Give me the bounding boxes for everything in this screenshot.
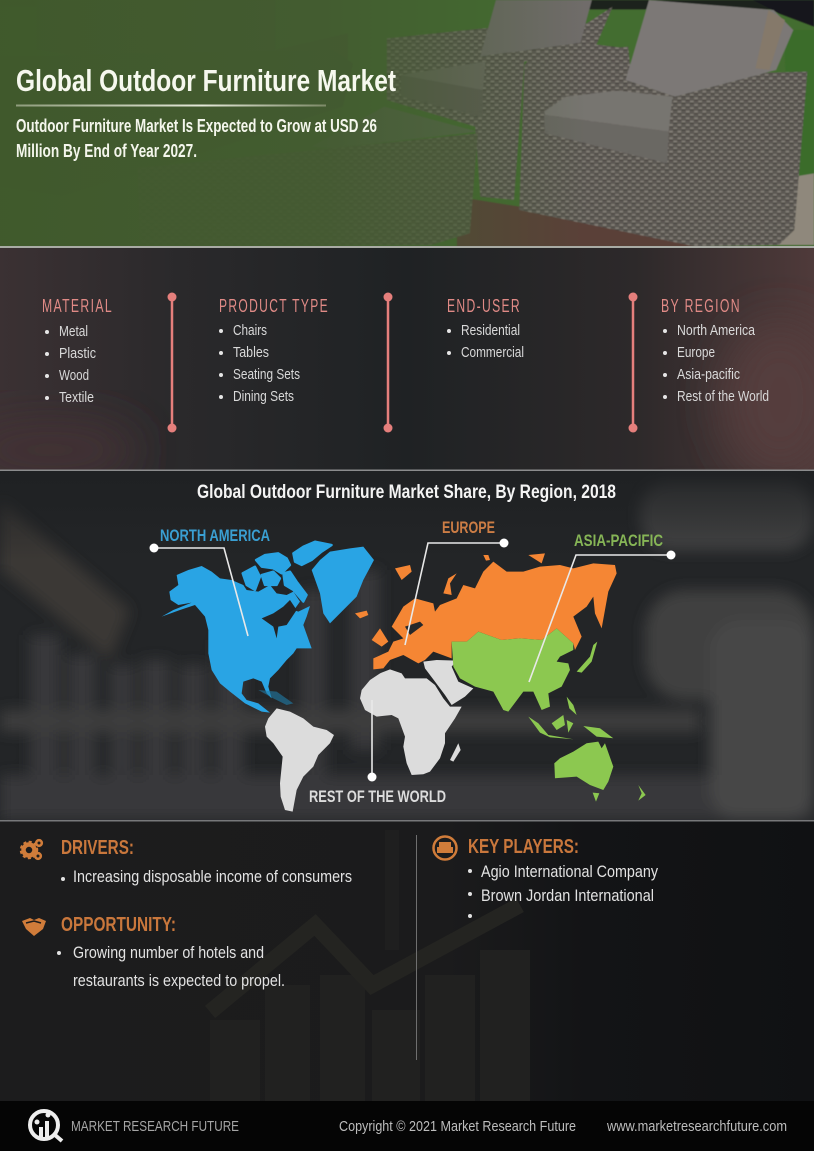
column: by region: Asia-pacific xyxy=(677,366,740,383)
world map: south america xyxy=(265,708,334,812)
leader line: north america xyxy=(150,544,248,636)
column: end-user xyxy=(447,296,524,361)
panel: market segments xyxy=(0,248,814,480)
opportunity list: Growing number of hotels and xyxy=(73,943,264,962)
opportunity list: restaurants is expected to propel. xyxy=(73,971,285,990)
column: end-user: Residential xyxy=(461,322,520,339)
column: end-user: END-USER xyxy=(447,296,521,316)
leader line: rest of the world xyxy=(368,700,376,782)
panel: regional map background xyxy=(0,470,814,820)
drivers list: Increasing disposable income of consumers xyxy=(73,867,352,886)
column: material: Textile xyxy=(59,389,94,406)
key players list xyxy=(468,862,658,918)
map label: asia-pacific: ASIA-PACIFIC xyxy=(574,531,663,550)
world map: europe and russia xyxy=(355,553,617,669)
column: product type: Chairs xyxy=(233,322,267,339)
icon: handshake xyxy=(22,918,46,936)
opportunity list xyxy=(57,943,285,990)
column: by region: Europe xyxy=(677,344,715,361)
column: product type: Seating Sets xyxy=(233,366,300,383)
column: product type xyxy=(219,296,329,405)
icon: key players chair badge xyxy=(434,836,456,860)
leader line: asia-pacific xyxy=(529,550,676,682)
column: material: Plastic xyxy=(59,345,96,362)
subtitle text: Outdoor Furniture Market Is Expected to Grow at USD 26 xyxy=(16,116,377,136)
subtitle text: Million By End of Year 2027. xyxy=(16,141,197,161)
heading: drivers: DRIVERS: xyxy=(61,837,134,859)
title rule xyxy=(16,104,326,106)
vertical pin dividers xyxy=(168,292,638,432)
panel: drivers, opportunity and key players xyxy=(0,820,814,1101)
footer band xyxy=(0,1101,814,1151)
chart heading: Global Outdoor Furniture Market Share, By Region, 2018 xyxy=(197,482,616,503)
leader line: europe xyxy=(405,538,508,645)
column: by region: BY REGION xyxy=(661,296,741,316)
column: by region xyxy=(661,296,769,405)
column: product type: Tables xyxy=(233,344,269,361)
map label: rest of the world: REST OF THE WORLD xyxy=(309,787,446,806)
column: end-user: Commercial xyxy=(461,344,524,361)
map label: north america: NORTH AMERICA xyxy=(160,526,270,545)
world map: north america xyxy=(162,542,374,713)
column: by region: Rest of the World xyxy=(677,388,769,405)
column: material: MATERIAL xyxy=(42,296,113,316)
column: product type: PRODUCT TYPE xyxy=(219,296,329,316)
panel: hero photo of outdoor furniture xyxy=(0,0,814,247)
heading: opportunity: OPPORTUNITY: xyxy=(61,914,176,936)
map label: europe: EUROPE xyxy=(442,518,495,537)
icon: market research future logo xyxy=(30,1111,62,1141)
key players list: Agio International Company xyxy=(481,862,658,881)
column: product type: Dining Sets xyxy=(233,388,294,405)
heading: key players: KEY PLAYERS: xyxy=(468,836,579,858)
column: material: Metal xyxy=(59,323,88,340)
footer brand name: MARKET RESEARCH FUTURE xyxy=(71,1118,239,1135)
column: material xyxy=(42,296,113,406)
icon: gears xyxy=(21,840,42,859)
world map: africa and middle east xyxy=(360,660,473,775)
heading: main title: Global Outdoor Furniture Market xyxy=(16,63,396,98)
footer website: www.marketresearchfuture.com xyxy=(606,1118,787,1135)
column: by region: North America xyxy=(677,322,756,339)
world map: asia-pacific xyxy=(452,628,646,802)
subtitle text xyxy=(16,116,377,161)
key players list: Brown Jordan International xyxy=(481,886,654,905)
column: material: Wood xyxy=(59,367,89,384)
footer copyright: Copyright © 2021 Market Research Future xyxy=(339,1118,576,1135)
